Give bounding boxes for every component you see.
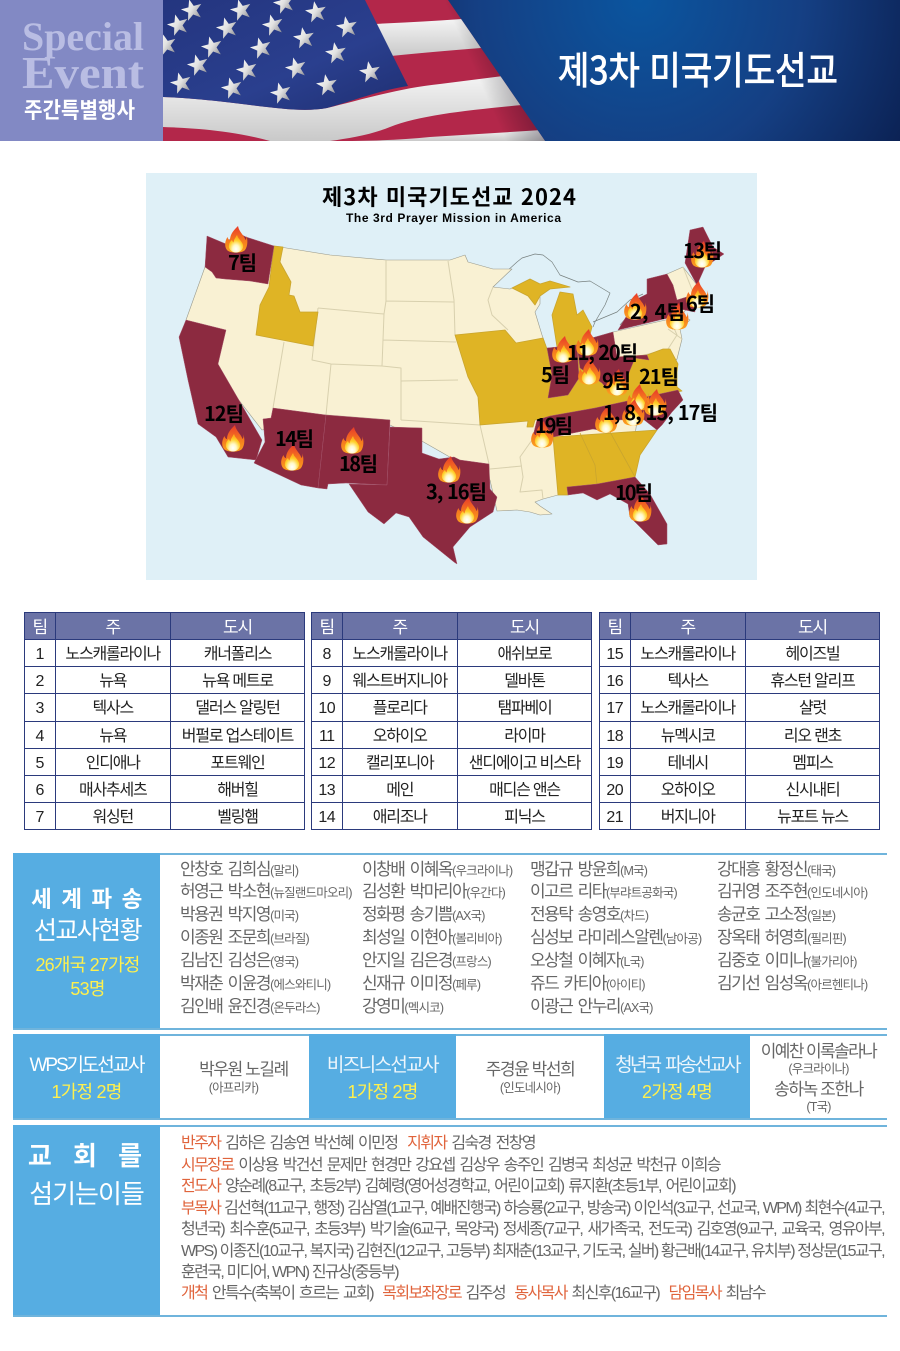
table: teams 1-7: 캐너폴리스 [204, 646, 271, 663]
table: teams 8-14: 캘리포니아 [366, 755, 434, 772]
table: teams 8-14: 피닉스 [504, 809, 545, 826]
team labels: 12팀 [204, 398, 244, 427]
team labels: 9팀 [602, 365, 631, 394]
missionary list column 4: 김중호 이미나(불가리아) [717, 951, 857, 970]
map title: 제3차 미국기도선교 2024 [322, 180, 576, 212]
panel: youth missionaries: 청년국 파송선교사 [615, 1055, 739, 1076]
table: teams 1-7: 워싱턴 [92, 809, 133, 826]
youth missionary names [761, 1042, 878, 1114]
panel: business missionaries [309, 1034, 456, 1118]
missionary list column 3: 이광근 안누리(AX국) [530, 997, 653, 1016]
table: teams 8-14: 11 [319, 728, 335, 744]
church servants text: 부목사 김선혁(11교구, 행정) 김삼열(1교구, 예배진행국) 하승룡(2교구, 방송국) 이인석(3교구, 선교국, WPM) 최현수(4교구, [181, 1200, 884, 1217]
table: teams 15-21: 노스캐롤라이나 [640, 646, 735, 663]
flame icons [222, 226, 713, 524]
table: teams 15-21: 16 [606, 673, 623, 690]
table: teams 8-14: 샌디에이고 비스타 [469, 755, 580, 772]
team labels: 14팀 [275, 423, 314, 452]
missionary list column 2 [362, 860, 512, 1016]
missionary list column 3: 이고르 리타(부랴트공화국) [530, 882, 677, 901]
table: teams 8-14: 팀 [320, 618, 334, 637]
table: teams 8-14: 노스캐롤라이나 [352, 646, 447, 663]
table: teams 8-14: 10 [318, 700, 335, 717]
table: teams 1-7: 주 [106, 618, 120, 637]
youth missionary names: 송하녹 조한나 [774, 1080, 863, 1099]
missionary list column 2: 최성일 이현아(볼리비아) [362, 928, 502, 947]
missionary list column 4: 강대흥 황정신(태국) [717, 860, 835, 878]
panel: WPS prayer missionaries [13, 1034, 160, 1118]
table: teams 15-21: 멤피스 [792, 755, 833, 772]
team labels: 13팀 [683, 235, 722, 264]
missionary list column 1: 박용권 박지영(미국) [180, 905, 298, 924]
table: teams 1-7: 텍사스 [92, 700, 133, 717]
table: teams 15-21: 17 [606, 700, 623, 717]
missionary list column 1: 이종원 조문희(브라질) [180, 928, 309, 947]
table: teams 1-7: 해버힐 [217, 782, 258, 799]
table: teams 8-14: 9 [323, 673, 331, 690]
table: teams 8-14: 애쉬보로 [497, 646, 552, 663]
great lakes outline [493, 254, 643, 327]
panel: church servants heading [13, 1125, 160, 1315]
cream states [186, 246, 697, 515]
WPS missionary names: (아프리카) [209, 1081, 258, 1095]
special event panel [0, 0, 163, 141]
table: teams 15-21: 샬럿 [799, 700, 826, 717]
panel: church servants heading: 섬기는이들 [29, 1179, 144, 1209]
table: teams 8-14: 매디슨 앤슨 [489, 782, 560, 799]
missionary list column 2: 강영미(멕시코) [362, 997, 443, 1016]
table: teams 8-14: 13 [318, 782, 335, 799]
table: teams 8-14: 웨스트버지니아 [352, 673, 447, 690]
special event panel: Event [22, 47, 145, 98]
team labels: 5팀 [541, 359, 570, 388]
table: teams 15-21: 도시 [798, 618, 827, 637]
table: teams 15-21: 휴스턴 알리프 [770, 673, 855, 690]
table: teams 8-14: 14 [318, 809, 335, 826]
table: teams 15-21: 헤이즈빌 [785, 646, 840, 663]
table: teams 1-7: 2 [36, 673, 44, 690]
table: teams 1-7: 뉴욕 메트로 [202, 673, 273, 690]
table: teams 15-21: 버지니아 [661, 809, 715, 826]
panel: WPS prayer missionaries: WPS기도선교사 [30, 1055, 143, 1076]
church servants text [181, 1134, 884, 1302]
team labels: 1, 8, 15, 17팀 [603, 397, 718, 426]
table: teams 8-14: 애리조나 [373, 809, 427, 826]
missionary list column 4: 김기선 임성옥(아르헨티나) [717, 974, 867, 993]
church servants text: 전도사 양순례(8교구, 초등2부) 김혜령(영어성경학교, 어린이교회) 류지환(초등1부, 어린이교회) [181, 1178, 735, 1195]
table: teams 1-7: 팀 [33, 618, 47, 637]
table: teams 15-21: 텍사스 [667, 673, 708, 690]
panel: world missionaries heading [13, 853, 160, 1028]
church servants text: 훈련국, 미디어, WPN) 진규상(중등부) [181, 1264, 398, 1281]
table: teams 8-14: 8 [323, 646, 331, 663]
missionary list column 1 [180, 860, 352, 1016]
missionary list column 1: 김남진 김성은(영국) [180, 951, 298, 970]
maroon states [179, 227, 724, 564]
table: teams 15-21: 18 [606, 728, 623, 744]
panel: world missionaries heading: 선교사현황 [34, 917, 141, 945]
panel: youth missionaries: 2가정 4명 [642, 1082, 712, 1102]
business missionary names: 주경윤 박선희 [486, 1060, 574, 1079]
table: teams 8-14 [311, 612, 592, 830]
table: teams 1-7: 매사추세츠 [79, 782, 147, 799]
team labels: 21팀 [639, 361, 679, 390]
business missionary names [486, 1060, 574, 1095]
missionary list column 4: 송균호 고소정(일본) [717, 905, 835, 924]
table: teams 1-7: 버펄로 업스테이트 [182, 728, 293, 744]
youth missionary names: (T국) [806, 1100, 831, 1114]
panel: world missionaries heading: 26개국 27가정 [35, 955, 140, 975]
missionary list column 1: 김인배 윤진경(온두라스) [180, 997, 320, 1016]
table: teams 1-7: 3 [36, 700, 44, 717]
missionary list column 2: 이창배 이혜옥(우크라이나) [362, 860, 512, 878]
table: teams 15-21: 주 [681, 618, 695, 637]
table: teams 15-21: 신시내티 [785, 782, 840, 799]
us map [179, 227, 724, 564]
team labels: 11, 20팀 [567, 337, 638, 366]
table: teams 8-14: 도시 [510, 618, 539, 637]
panel: business missionaries: 1가정 2명 [348, 1082, 417, 1102]
table: teams 15-21: 뉴멕시코 [661, 728, 715, 744]
missionary list column 4: 장옥태 허영희(필리핀) [717, 928, 846, 947]
panel: youth missionaries [604, 1034, 750, 1118]
table: teams 1-7 [24, 612, 305, 830]
panel: WPS prayer missionaries: 1가정 2명 [52, 1082, 121, 1102]
table: teams 1-7: 포트웨인 [210, 755, 265, 772]
missionary list column 4 [717, 860, 868, 993]
church servants text: 개척 안특수(축복이 흐르는 교회) 목회보좌장로 김주성 동사목사 최신후(16교구) 담임목사 최남수 [181, 1285, 765, 1302]
main title: 제3차 미국기도선교 [558, 40, 838, 95]
table: teams 15-21: 노스캐롤라이나 [640, 700, 735, 717]
sea background [146, 173, 757, 580]
table: teams 15-21: 팀 [608, 618, 622, 637]
table: teams 8-14: 델바톤 [504, 673, 545, 690]
missionary list column 1: 박재춘 이윤경(에스와티니) [180, 974, 330, 993]
missionary list column 3: 심성보 라미레스알렌(남아공) [530, 928, 701, 947]
table: teams 15-21: 뉴포트 뉴스 [777, 809, 848, 826]
american flag [153, 0, 563, 141]
panel: world missionaries heading: 세 계 파 송 [31, 887, 144, 912]
table: teams 15-21: 21 [606, 809, 623, 826]
table: teams 1-7: 도시 [223, 618, 252, 637]
panel: church servants heading: 교 회 를 [28, 1141, 149, 1171]
table: teams 1-7: 7 [36, 809, 44, 826]
team labels: 6팀 [686, 288, 715, 317]
missionary list column 2: 정화평 송기쁨(AX국) [362, 905, 485, 924]
table: teams 8-14: 탬파베이 [497, 700, 552, 717]
table: teams 15-21: 19 [606, 755, 623, 772]
youth missionary names: (우크라이나) [788, 1062, 849, 1076]
missionary list column 3 [530, 860, 702, 1016]
missionary list column 3: 전용탁 송영호(차드) [530, 905, 648, 924]
church servants text: 시무장로 이상용 박건선 문제만 현경만 강요셉 김상우 송주인 김병국 최성균 박천규 이희승 [181, 1157, 720, 1174]
table: teams 1-7: 벨링햄 [217, 809, 258, 826]
gold states [256, 246, 682, 495]
missionary list column 3: 오상철 이혜자(L국) [530, 951, 644, 970]
team labels: 2, 4팀 [630, 296, 685, 325]
church servants text: 반주자 김하은 김송연 박선혜 이민정 지휘자 김숙경 전창영 [181, 1135, 535, 1152]
team labels: 7팀 [228, 247, 257, 276]
table: teams 8-14: 12 [318, 755, 335, 772]
table: teams 8-14: 주 [393, 618, 407, 637]
team labels: 18팀 [339, 448, 378, 477]
table: teams 1-7: 6 [36, 782, 44, 799]
table: teams 1-7: 댈러스 알링턴 [195, 700, 280, 717]
table: teams 15-21: 20 [606, 782, 623, 799]
special event panel: Special [22, 14, 144, 59]
team labels: 19팀 [535, 410, 573, 439]
table: teams 1-7: 뉴욕 [99, 673, 126, 690]
table: teams 1-7: 인디애나 [86, 755, 140, 772]
team labels: 3, 16팀 [426, 476, 487, 505]
missionary list column 3: 맹갑규 방윤희(M국) [530, 860, 647, 878]
header banner [0, 0, 900, 141]
navy background [400, 0, 900, 141]
table: teams 1-7: 5 [36, 755, 44, 772]
missionary list column 3: 쥬드 카티아(아이티) [530, 974, 645, 993]
special event panel: 주간특별행사 [24, 93, 135, 125]
table: teams 8-14: 라이마 [504, 728, 545, 744]
church servants text: 청년국) 최수훈(5교구, 초등3부) 박기술(6교구, 목양국) 정세종(7교구, 새가족국, 전도국) 김호영(9교구, 교육국, 영유아부, [181, 1221, 884, 1238]
map panel [146, 173, 757, 580]
table: teams 1-7: 노스캐롤라이나 [65, 646, 160, 663]
missionary list column 2: 안지일 김은경(프랑스) [362, 951, 491, 970]
missionary list column 1: 허영근 박소현(뉴질랜드마오리) [180, 882, 352, 901]
missionary list column 1: 안창호 김희심(말리) [180, 860, 298, 878]
state borders [273, 260, 695, 499]
business missionary names: (인도네시아) [500, 1081, 560, 1095]
table: teams 15-21: 15 [606, 646, 623, 663]
table: teams 1-7: 4 [36, 728, 44, 744]
WPS missionary names: 박우원 노길례 [199, 1060, 288, 1079]
table: teams 1-7: 뉴욕 [99, 728, 126, 744]
panel: world missionaries heading: 53명 [70, 979, 105, 999]
team labels: 10팀 [615, 477, 653, 506]
panel: business missionaries: 비즈니스선교사 [327, 1055, 438, 1076]
table: teams 15-21: 리오 랜초 [784, 728, 841, 744]
missionary list column 4: 김귀영 조주현(인도네시아) [717, 882, 867, 901]
table: teams 8-14: 메인 [386, 782, 413, 799]
table: teams 1-7: 1 [36, 646, 44, 663]
table: teams 8-14: 오하이오 [373, 728, 427, 744]
table: teams 15-21 [599, 612, 880, 830]
missionary list column 2: 신재규 이미정(페루) [362, 974, 480, 993]
missionary list column 2: 김성환 박마리아(우간다) [362, 882, 505, 901]
table: teams 15-21: 오하이오 [661, 782, 715, 799]
map title: The 3rd Prayer Mission in America [346, 211, 561, 225]
youth missionary names: 이예찬 이록솔라나 [761, 1042, 876, 1061]
team labels [204, 235, 722, 506]
WPS missionary names [199, 1060, 288, 1095]
table: teams 15-21: 테네시 [667, 755, 708, 772]
church servants text: WPS) 이종진(10교구, 복지국) 김현진(12교구, 고등부) 최재춘(13교구, 기도국, 실버) 황근배(14교구, 유치부) 정상문(15교구, [181, 1243, 884, 1260]
table: teams 8-14: 플로리다 [373, 700, 427, 717]
